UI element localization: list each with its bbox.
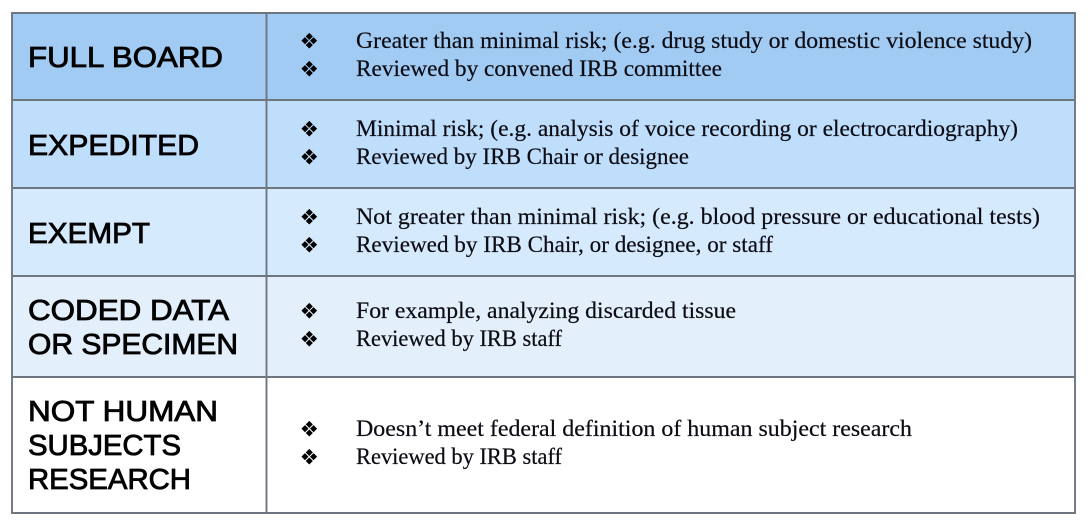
row: coded data or specimen: ❖ [300,299,319,324]
row: exempt: ❖ [300,205,319,230]
row: coded data or specimen: Reviewed by IRB staff [356,326,562,351]
row: exempt [12,188,1075,276]
row: not human subjects research: Reviewed by IRB staff [356,444,562,469]
row: not human subjects research: ❖ [300,417,319,442]
row: full board [12,13,1075,100]
row: expedited: EXPEDITED [28,130,199,162]
row: expedited [12,100,1075,188]
row: exempt: ❖ [300,233,319,258]
row: full board: FULL BOARD [28,42,223,74]
row: coded data or specimen: For example, analyzing discarded tissue [356,298,736,323]
row: exempt: Not greater than minimal risk; (e.g. blood pressure or educational tests) [356,204,1040,229]
row: full board: Reviewed by convened IRB committee [356,56,722,81]
row: not human subjects research: ❖ [300,445,319,470]
row: full board: ❖ [300,29,319,54]
row: not human subjects research: SUBJECTS [28,430,181,462]
row: expedited: Minimal risk; (e.g. analysis of voice recording or electrocardiography) [356,116,1018,141]
row: expedited: ❖ [300,117,319,142]
row: not human subjects research: NOT HUMAN [28,396,218,428]
row: coded data or specimen: CODED DATA [28,295,230,327]
row: not human subjects research: Doesn’t meet federal definition of human subject research [356,416,913,441]
row: coded data or specimen: ❖ [300,327,319,352]
row: not human subjects research [12,377,1075,513]
row: full board: ❖ [300,57,319,82]
row: expedited: ❖ [300,145,319,170]
row: coded data or specimen [12,276,1075,377]
row: full board: Greater than minimal risk; (e.g. drug study or domestic violence study) [356,28,1032,53]
row: not human subjects research: RESEARCH [28,464,191,496]
row: coded data or specimen: OR SPECIMEN [28,329,238,361]
row: exempt: EXEMPT [28,218,150,250]
row: expedited: Reviewed by IRB Chair or designee [356,144,689,169]
row: exempt: Reviewed by IRB Chair, or designee, or staff [356,232,773,257]
